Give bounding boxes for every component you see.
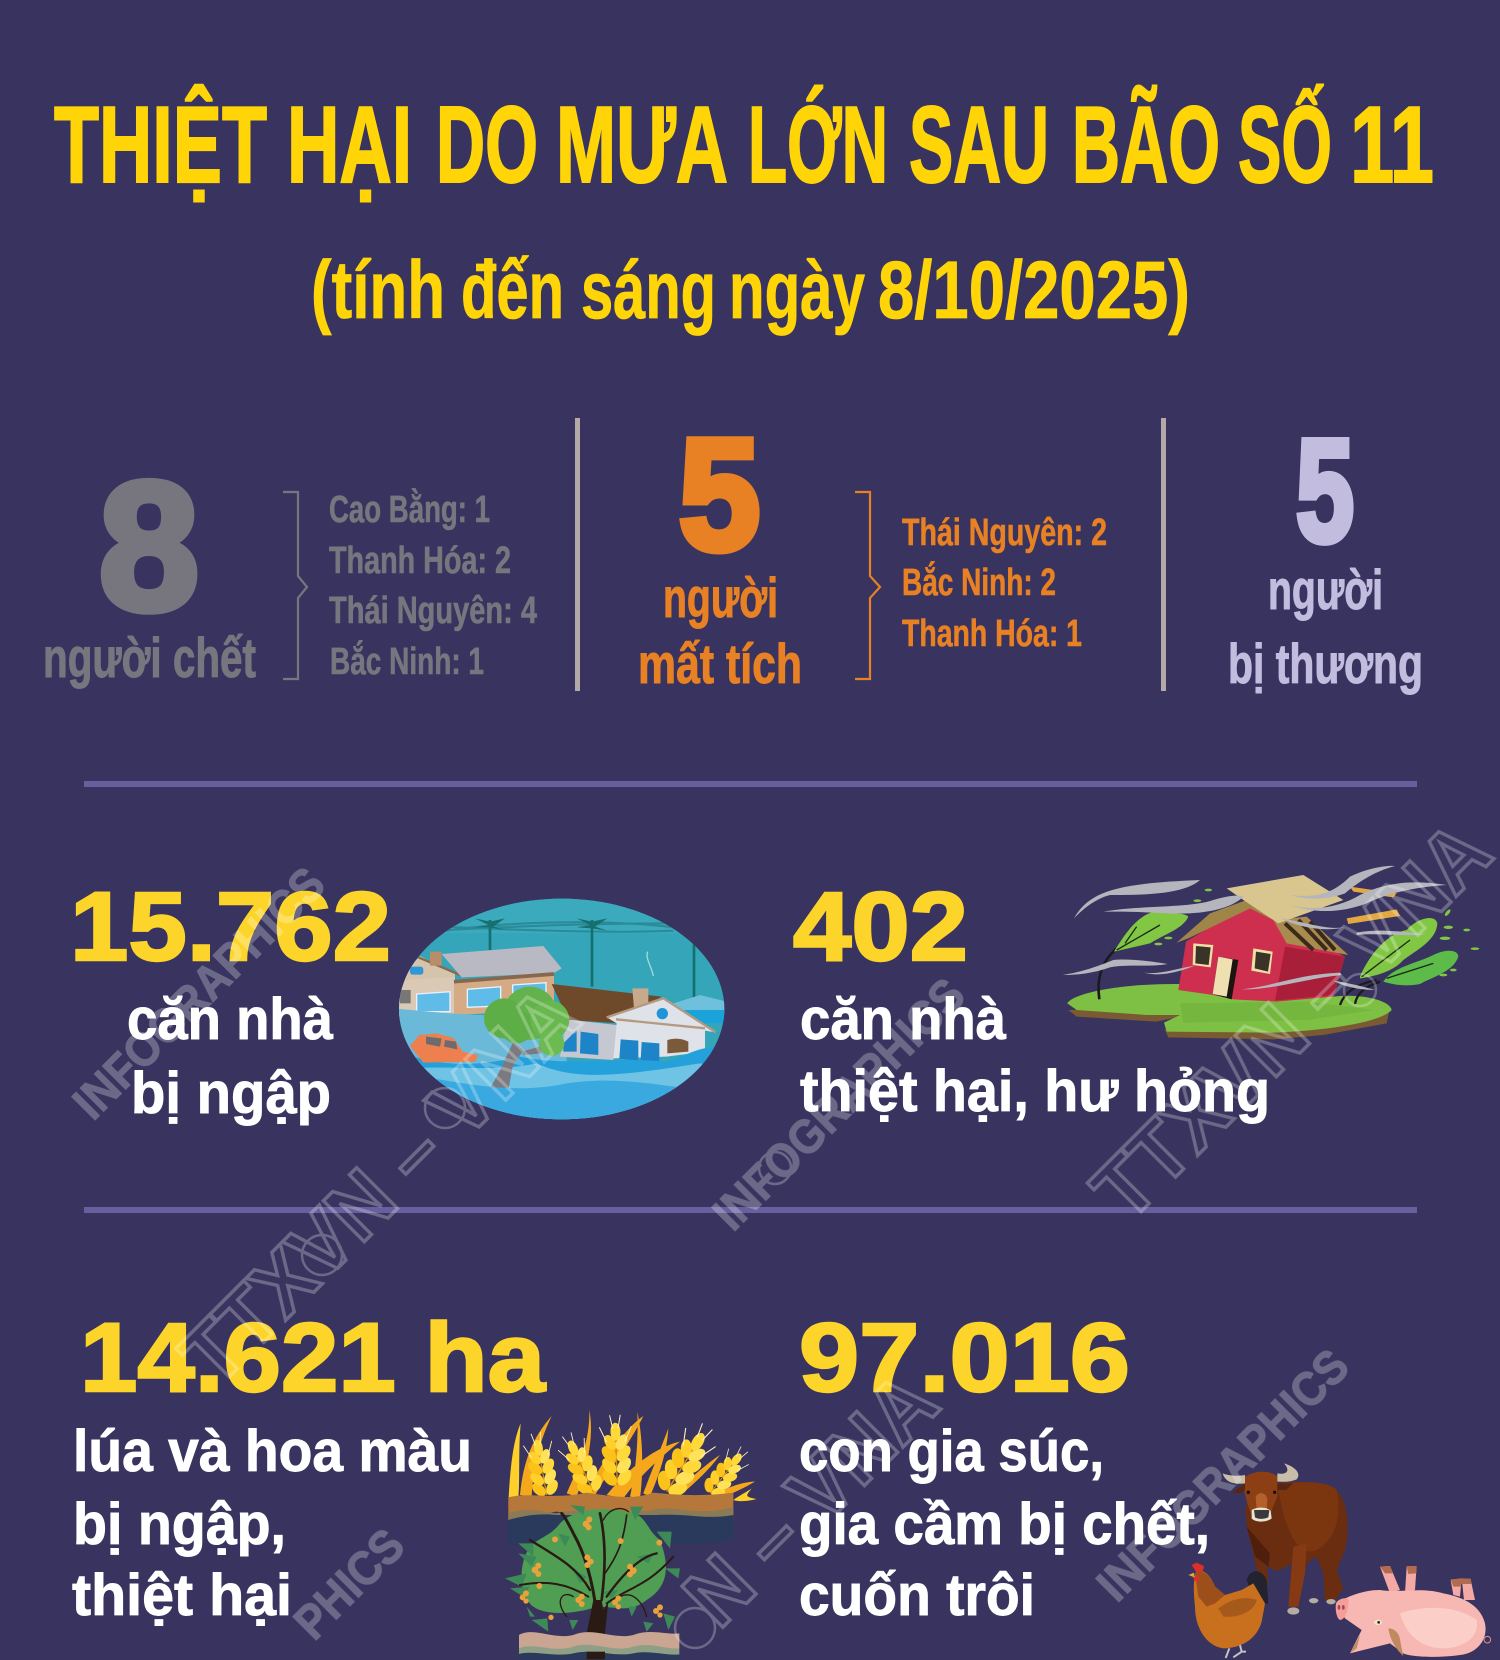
right leaves [1340, 980, 1380, 1005]
title: THIỆT [54, 84, 267, 206]
pig [1336, 1566, 1491, 1657]
watermarks: INFOGRAPHICS [1087, 1340, 1360, 1612]
stat: dead: 8 [99, 444, 199, 648]
fruit [520, 1516, 663, 1620]
left house [399, 967, 455, 1016]
stat: dead: Bắc Ninh: 1 [330, 639, 484, 683]
subtitle: sáng [581, 245, 716, 336]
stat: injured: bị thương [1228, 632, 1423, 695]
stat: dead: Thái Nguyên: 4 [329, 590, 537, 632]
mid water [393, 1008, 567, 1083]
subtitle [311, 245, 1190, 336]
stat: missing: Bắc Ninh: 2 [902, 560, 1056, 604]
wind streaks [1063, 866, 1447, 990]
tree foliage [522, 1509, 666, 1613]
lower soil [519, 1632, 679, 1652]
title: HẠI [287, 84, 412, 206]
title [54, 84, 1434, 206]
soil [508, 1493, 733, 1520]
stat: flooded houses [70, 872, 391, 1126]
watermarks: INFOGRAPHICS [63, 858, 336, 1130]
stat: missing: mất tích [638, 632, 802, 695]
title: SỐ [1238, 84, 1332, 206]
title: MƯA [556, 84, 728, 206]
icon: cow, chicken, pig [1188, 1463, 1491, 1658]
branches [520, 1509, 673, 1617]
stat: injured [1228, 409, 1423, 695]
title: SAU [909, 84, 1049, 206]
stat: missing: Thái Nguyên: 2 [902, 512, 1107, 554]
title: LỚN [748, 84, 888, 206]
stat: crops: bị ngập, [73, 1492, 286, 1557]
stat: injured: 5 [1296, 409, 1354, 572]
stat: dead: người chết [43, 626, 256, 689]
stat: flooded houses: 15.762 [70, 872, 391, 981]
planks [1350, 887, 1397, 897]
stat: injured: người [1268, 558, 1383, 621]
icon: wind-damaged house [1063, 866, 1479, 1039]
stat: missing: Thanh Hóa: 1 [902, 613, 1082, 655]
watermarks: INFOGRAPHICS [703, 969, 976, 1241]
stat: crops: lúa và hoa màu [73, 1419, 472, 1484]
separator 2 [84, 1207, 1417, 1213]
icon: wheat and fruit tree [505, 1410, 757, 1659]
cow [1223, 1463, 1348, 1615]
watermarks [63, 804, 1500, 1650]
stat: dead: Cao Bằng: 1 [329, 487, 490, 531]
house [1178, 905, 1345, 1002]
tree [490, 1042, 523, 1090]
stat: damaged houses: thiệt hại, hư hỏng [800, 1059, 1270, 1124]
chicken [1188, 1563, 1268, 1658]
title: BÃO [1072, 84, 1220, 206]
stat: livestock [799, 1303, 1210, 1628]
watermarks: TTXVN – VNA [162, 969, 596, 1403]
stat: damaged houses [793, 872, 1270, 1124]
stat: livestock: con gia súc, [799, 1419, 1104, 1484]
stat: dead [43, 444, 537, 689]
title: 11 [1350, 84, 1434, 206]
wheat leaves [508, 1410, 757, 1505]
title: DO [436, 84, 538, 206]
stat: livestock: cuốn trôi [799, 1563, 1035, 1628]
stat: dead: Thanh Hóa: 2 [329, 540, 511, 582]
subtitle: 8/10/2025) [878, 245, 1190, 336]
stat: damaged houses: căn nhà [800, 987, 1007, 1052]
stat: flooded houses: căn nhà [127, 987, 334, 1052]
water layers [415, 1047, 714, 1120]
stat: damaged houses: 402 [793, 872, 968, 981]
subtitle: (tính [311, 245, 445, 336]
stat: missing: người [663, 566, 778, 629]
subtitle: ngày [729, 245, 865, 336]
stat: crops [72, 1303, 546, 1628]
stat: flooded houses: bị ngập [131, 1061, 331, 1126]
watermarks: PHICS [284, 1519, 415, 1650]
stat: missing: 5 [679, 407, 760, 583]
right house [552, 984, 662, 1023]
stat: livestock: gia cầm bị chết, [799, 1492, 1210, 1557]
icon: flooded houses [399, 898, 724, 1120]
separator 1 [84, 781, 1417, 787]
tree left [1099, 948, 1117, 999]
stat: missing [638, 407, 1107, 695]
divider 2 [1161, 418, 1166, 691]
stat: crops: 14.621 ha [80, 1303, 546, 1412]
stat: livestock: 97.016 [799, 1303, 1130, 1412]
car [410, 1033, 478, 1063]
divider 1 [575, 418, 580, 691]
long house [442, 946, 562, 977]
subtitle: đến [461, 245, 564, 336]
watermarks: N – VNA [665, 1354, 955, 1644]
stat: crops: thiệt hại [72, 1563, 292, 1628]
